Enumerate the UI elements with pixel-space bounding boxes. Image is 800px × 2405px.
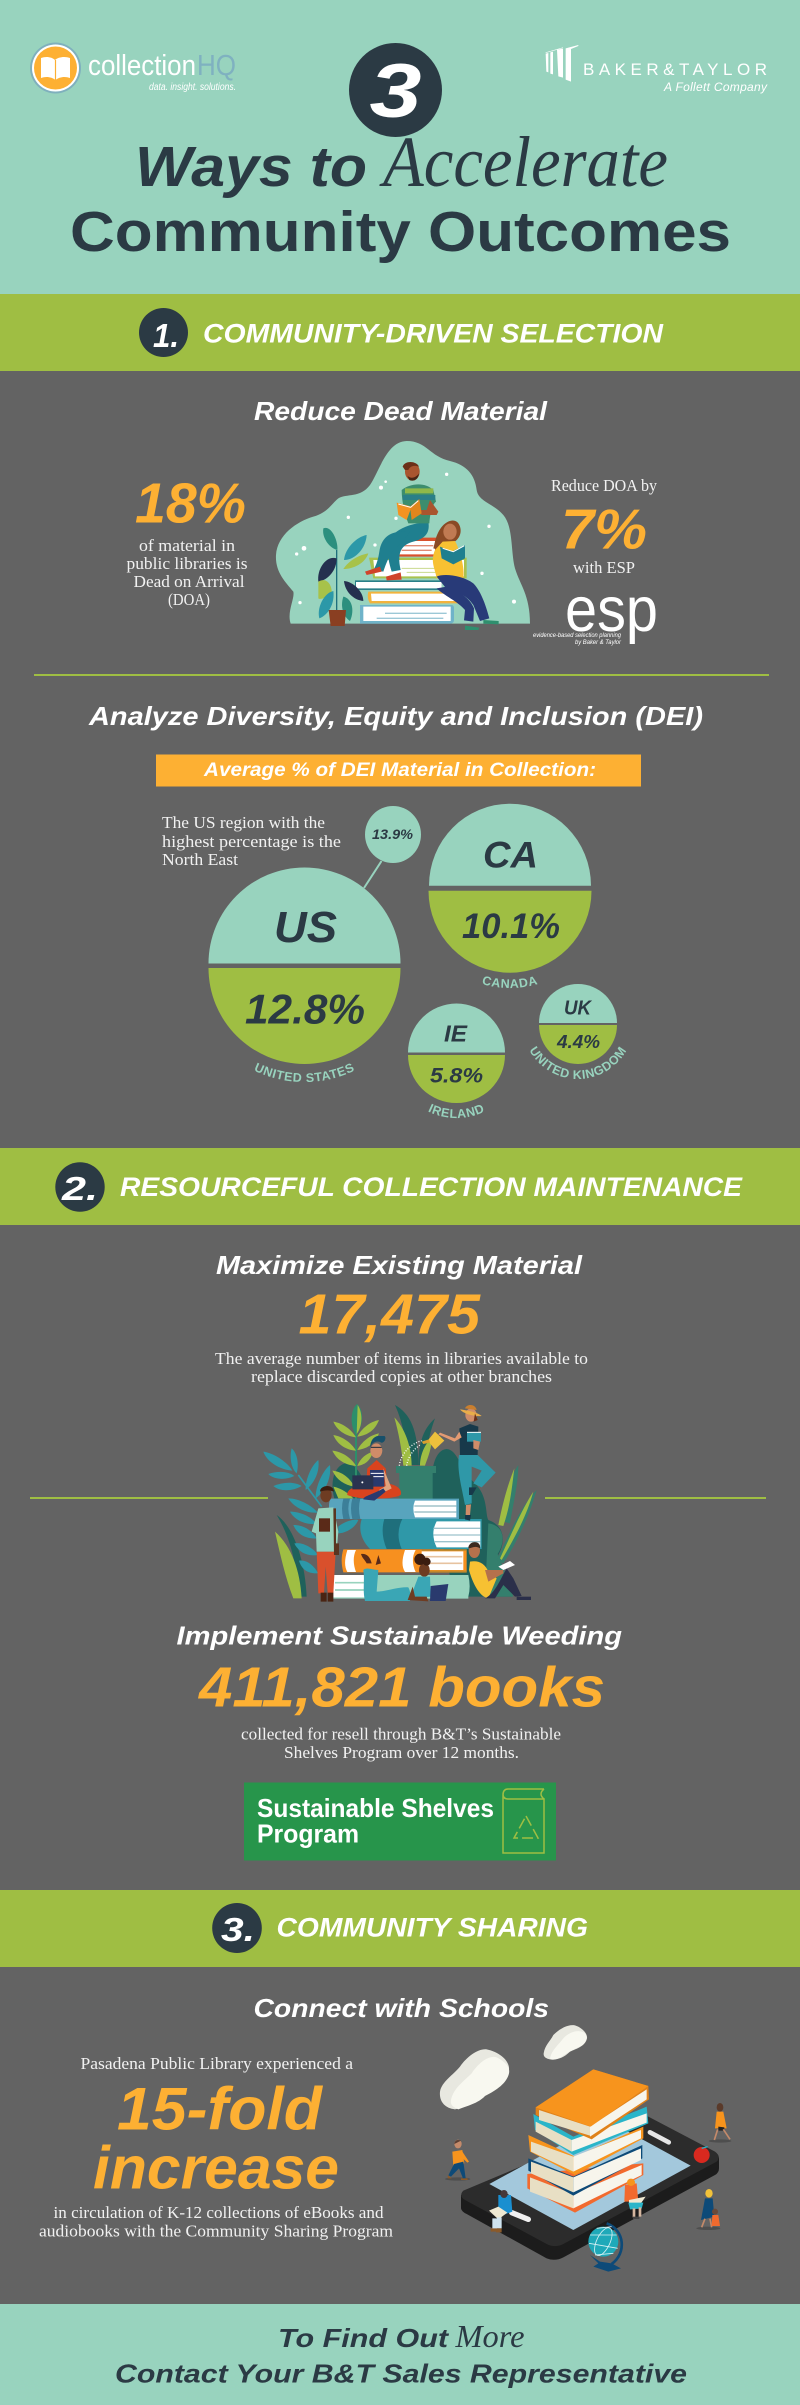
note: US region: North East (162, 850, 238, 869)
title: Ways to (135, 135, 367, 199)
heading: Implement Sustainable Weeding: Implement Sustainable Weeding (176, 1620, 622, 1650)
stat: 15-fold increase: Pasadena Public Library experienced a (80, 2054, 354, 2073)
icons: small people (445, 2103, 731, 2232)
bubble: United States: 12.8% (245, 986, 365, 1032)
bubble: Ireland: IRELAND (428, 1104, 484, 1118)
bubble: United Kingdom: 4.4% (556, 1032, 600, 1052)
bubble: Canada: 10.1% (462, 907, 560, 946)
heading: Maximize Existing Material: Maximize Existing Material (216, 1250, 583, 1280)
bubble: Ireland: 5.8% (430, 1064, 483, 1088)
badge: number 3 (349, 43, 442, 137)
logo: Baker & Taylor: A Follett Company (663, 80, 768, 94)
bubble: United States: UNITED STATES (255, 1062, 354, 1082)
logo: Baker & Taylor (546, 45, 768, 94)
footer panel: More (454, 2318, 524, 2354)
bubble: United Kingdom: UK (564, 998, 592, 1020)
section banner 3: 3. (221, 1911, 255, 1948)
logo: esp: evidence-based selection planning (533, 632, 621, 639)
section banner 2: RESOURCEFUL COLLECTION MAINTENANCE (120, 1172, 743, 1202)
logo: esp (533, 575, 658, 646)
stat: 411,821 books: collected for resell through B&T’s Sustainable (241, 1724, 561, 1744)
footer panel: Contact Your B&T Sales Representative (115, 2358, 687, 2388)
logo: esp: esp (565, 575, 658, 645)
icon: globe (588, 2223, 622, 2272)
stat: reduce DOA by 7 percent: 7% (561, 498, 647, 562)
stat: 15-fold increase: increase (93, 2134, 339, 2202)
stat: 411,821 books (198, 1656, 605, 1762)
title: Accelerate (379, 122, 668, 202)
stat: reduce DOA by 7 percent: Reduce DOA by (551, 476, 658, 495)
logo: Sustainable Shelves Program (244, 1782, 556, 1860)
bubble: United States (208, 868, 400, 1082)
stat: 15-fold increase (39, 2054, 393, 2240)
callout: 13.9 percent (364, 806, 421, 888)
logo: esp: by Baker & Taylor (575, 639, 622, 646)
badge: number 3: 3 (370, 49, 422, 134)
section banner 1: COMMUNITY-DRIVEN SELECTION (203, 318, 664, 348)
phone (461, 2115, 719, 2260)
illustration: readers on book stack (276, 441, 530, 630)
stat: 17,475 (215, 1282, 588, 1386)
bubble: Ireland: IE (444, 1020, 468, 1046)
icon: apple (694, 2147, 710, 2163)
callout: 13.9 percent: 13.9% (372, 826, 414, 842)
stat: 18 percent: Dead on Arrival (134, 572, 245, 591)
logo: collectionHQ: data. insight. solutions. (149, 82, 236, 93)
stat: 18 percent: (DOA) (168, 590, 210, 609)
logo: Sustainable Shelves Program: Sustainable Shelves (257, 1793, 494, 1823)
section banner 2: 2. (61, 1170, 98, 1207)
logo: Baker & Taylor: BAKER&TAYLOR (583, 60, 767, 79)
stat: 18 percent: public libraries is (126, 554, 248, 573)
illustration: people on books with plants (263, 1404, 537, 1602)
stat: 15-fold increase: in circulation of K-12 collections of eBooks and (54, 2203, 384, 2222)
icon: book stack (527, 2069, 649, 2213)
logo: Sustainable Shelves Program: Program (257, 1818, 359, 1848)
section banner 1: 1. (153, 317, 179, 354)
stat: 18 percent: 18% (135, 472, 246, 536)
banner: average DEI material (156, 754, 641, 786)
note: US region: highest percentage is the (162, 832, 341, 851)
stat: 18 percent (126, 472, 248, 609)
logo: collectionHQ: collection (88, 50, 196, 82)
bubble: Ireland (408, 1004, 505, 1118)
logo: collectionHQ (30, 42, 236, 94)
stat: 17,475: The average number of items in libraries available to (215, 1349, 588, 1368)
stat: 411,821 books: 411,821 books (198, 1656, 605, 1720)
banner: average DEI material: Average % of DEI Material in Collection: (203, 760, 596, 781)
heading: Reduce Dead Material: Reduce Dead Material (254, 396, 548, 426)
bubble: United Kingdom: UNITED KINGDOM (530, 1046, 626, 1079)
bubble: Canada (428, 804, 592, 988)
bubble: Canada: CANADA (482, 976, 538, 988)
illustration: phone with book stack (440, 2025, 731, 2272)
note: US region: The US region with the (162, 813, 325, 832)
stat: 15-fold increase: audiobooks with the Community Sharing Program (39, 2222, 393, 2240)
stat: 18 percent: of material in (139, 536, 235, 555)
bubble: United States: US (274, 903, 337, 952)
note: US region (162, 813, 341, 869)
stat: 17,475: replace discarded copies at other branches (251, 1367, 552, 1386)
footer panel (0, 2304, 800, 2405)
stat: reduce DOA by 7 percent (551, 476, 658, 577)
section banner 1 (0, 294, 800, 371)
title (70, 122, 731, 264)
footer panel: To Find Out (278, 2323, 450, 2353)
icon: clouds (440, 2025, 587, 2109)
section banner 3: COMMUNITY SHARING (276, 1912, 588, 1942)
heading: Analyze DEI: Analyze Diversity, Equity and Inclusion (DEI) (88, 701, 703, 731)
stat: 15-fold increase: 15-fold (117, 2076, 323, 2142)
header panel (0, 0, 800, 294)
title: Community Outcomes (70, 200, 731, 264)
section banner 3 (0, 1890, 800, 1967)
stat: 411,821 books: Shelves Program over 12 months. (284, 1743, 519, 1762)
icon: recycled book (503, 1789, 544, 1853)
bubble: United Kingdom (530, 984, 626, 1079)
bubble: Canada: CA (483, 834, 538, 876)
heading: Connect with Schools: Connect with Schools (254, 1993, 549, 2023)
logo: collectionHQ: HQ (197, 50, 236, 82)
section banner 2 (0, 1148, 800, 1225)
stat: 17,475: 17,475 (298, 1282, 481, 1346)
stat: reduce DOA by 7 percent: with ESP (573, 558, 635, 577)
